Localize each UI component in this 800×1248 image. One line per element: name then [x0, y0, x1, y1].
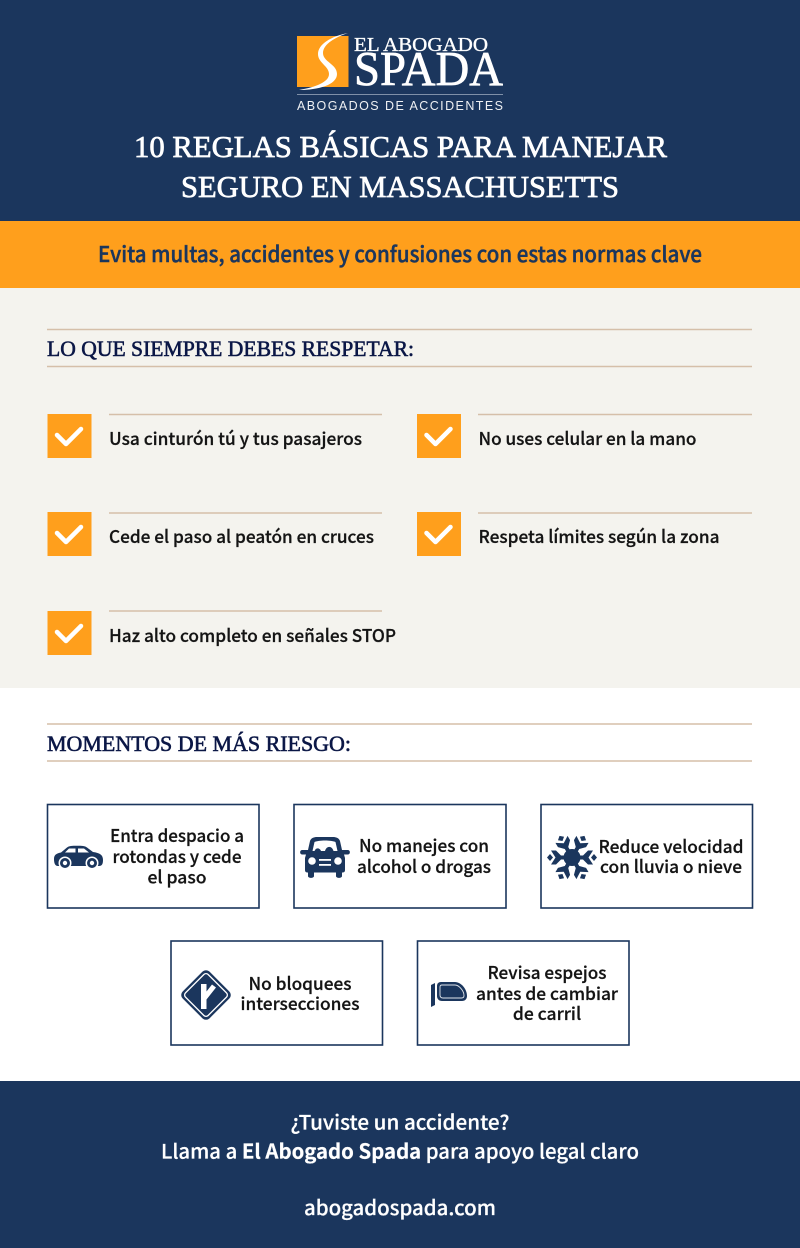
- card: rotondas: Entra despacio a: [110, 823, 244, 848]
- title: 10 REGLAS BÁSICAS PARA MANEJAR: [134, 129, 667, 164]
- rule: celular: No uses celular en la mano: [478, 426, 696, 451]
- icon: side mirror: [431, 982, 467, 1007]
- card: alcohol: No manejes con: [359, 833, 489, 858]
- card: intersecciones: No bloquees: [248, 971, 352, 996]
- panel: header: [0, 0, 800, 221]
- card: espejos: [418, 941, 629, 1045]
- panel: subtitle band: [0, 221, 800, 288]
- rule: peatón: Cede el paso al peatón en cruces: [109, 524, 374, 549]
- title: SEGURO EN MASSACHUSETTS: [181, 169, 619, 204]
- heading: momentos de más riesgo: MOMENTOS DE MÁS RIESGO:: [47, 731, 351, 756]
- panel: moments of risk: [0, 688, 800, 1081]
- website: abogadospada.com: [304, 1192, 496, 1221]
- rule: alto: Haz alto completo en señales STOP: [109, 623, 396, 648]
- card: espejos: Revisa espejos: [488, 960, 606, 985]
- icon: snowflake: [547, 832, 597, 883]
- card: alcohol: alcohol o drogas: [357, 854, 491, 879]
- logo: EL ABOGADO: [354, 35, 488, 56]
- card: alcohol: [294, 804, 506, 908]
- rule: peatón: [48, 512, 374, 556]
- logo: ABOGADOS DE ACCIDENTES: [297, 99, 503, 113]
- logo: [297, 33, 504, 113]
- rule: alto: [48, 611, 396, 655]
- footer question: ¿Tuviste un accidente?: [290, 1106, 510, 1136]
- title: [134, 129, 667, 204]
- subtitle: Evita multas, accidentes y confusiones con estas normas clave: [98, 238, 702, 269]
- card: rotondas: [48, 804, 259, 908]
- card: espejos: antes de cambiar: [476, 981, 619, 1006]
- icon: car side: [54, 846, 103, 870]
- card: rotondas: rotondas y cede: [112, 844, 242, 869]
- icon: junction road sign: [179, 968, 233, 1022]
- logo: SPADA: [354, 41, 504, 96]
- rule: cinturón: Usa cinturón tú y tus pasajeros: [109, 426, 362, 451]
- card: intersecciones: intersecciones: [240, 991, 360, 1016]
- footer call to action: Llama a El Abogado Spada para apoyo legal claro: [161, 1136, 639, 1164]
- rule: celular: [417, 414, 696, 458]
- card: espejos: de carril: [513, 1001, 581, 1026]
- card: intersecciones: [171, 941, 382, 1045]
- card: lluvia o nieve: con lluvia o nieve: [600, 854, 742, 879]
- panel: rules to respect: [0, 288, 800, 688]
- rule: límites: Respeta límites según la zona: [478, 524, 720, 549]
- card: lluvia o nieve: Reduce velocidad: [598, 834, 744, 859]
- rule: límites: [417, 512, 720, 556]
- panel: footer: [0, 1081, 800, 1248]
- icon: car front: [300, 837, 350, 878]
- rule: cinturón: [48, 414, 362, 458]
- card: lluvia o nieve: [541, 804, 752, 908]
- heading: lo que siempre debes respetar: LO QUE SIEMPRE DEBES RESPETAR:: [47, 336, 414, 361]
- card: rotondas: el paso: [147, 864, 207, 890]
